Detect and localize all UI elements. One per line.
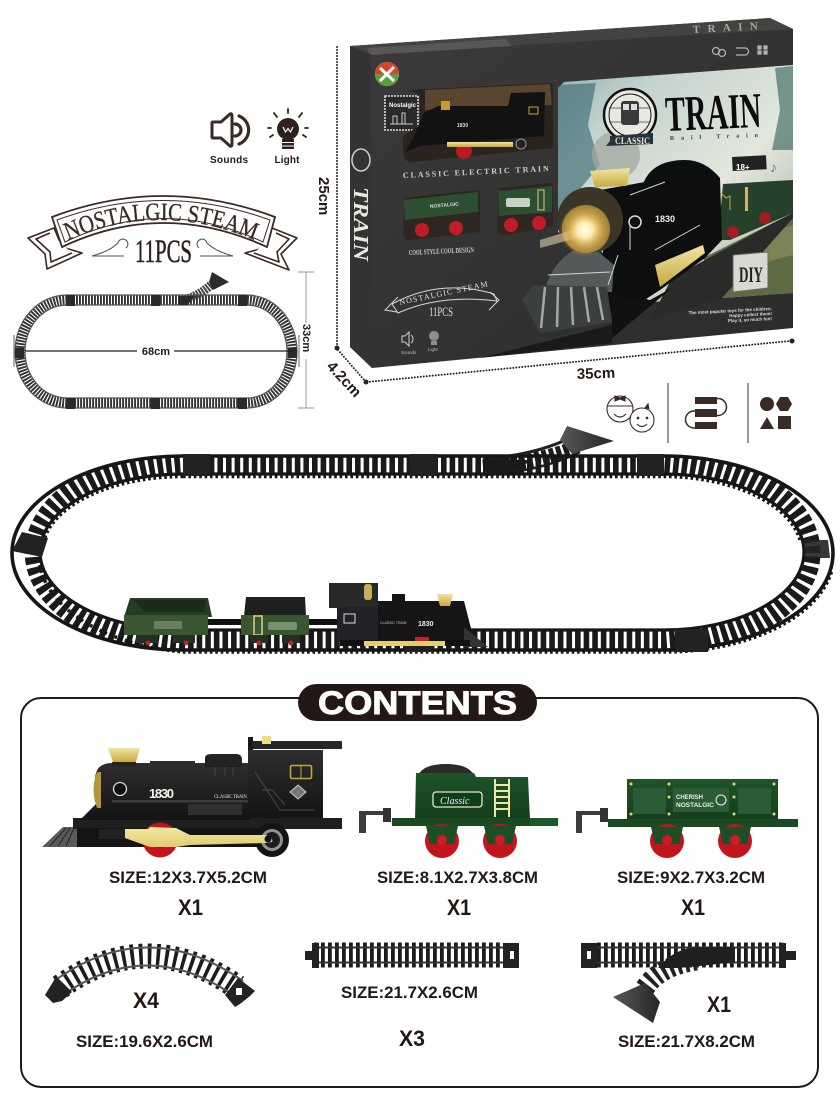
- label: NOSTALGIC: [676, 802, 714, 809]
- smoke: [592, 131, 640, 179]
- gold rod: [125, 827, 272, 847]
- icon: sounds: [210, 114, 249, 166]
- size labels row one: SIZE:12X3.7X5.2CM: [109, 869, 267, 887]
- quantities row two: [133, 988, 731, 1051]
- height measure: [298, 272, 314, 408]
- box stamp: Nostalgic: [389, 103, 417, 109]
- forest: [703, 213, 793, 298]
- rail studs: [40, 476, 832, 652]
- quantities row one: X1: [681, 895, 705, 920]
- name text: CLASSIC TRAIN: [214, 795, 247, 800]
- label: CHERISH: [676, 795, 703, 801]
- box feature icons: [401, 331, 439, 355]
- box art scene: [558, 65, 793, 302]
- small track diagram: [14, 272, 314, 409]
- couplings: [208, 619, 338, 625]
- body: [627, 779, 778, 820]
- size labels row one: [109, 869, 765, 887]
- curved track piece: [45, 948, 255, 1007]
- art title: TRAIN: [664, 82, 762, 142]
- ribbon body: [52, 196, 275, 247]
- chassis: [73, 818, 342, 829]
- box stamp: [385, 96, 418, 130]
- tender: [359, 764, 558, 858]
- red driving wheel: [142, 822, 178, 858]
- box small print: Happy collect them!: [729, 311, 773, 318]
- box spine: TRAIN: [349, 187, 373, 262]
- rod plate: [655, 245, 705, 287]
- art subtitle: Rail Train: [670, 133, 759, 142]
- wheels: [650, 824, 684, 858]
- locomotive on track: CLASSIC TRAIN: [380, 621, 407, 625]
- box body: [350, 18, 793, 368]
- dimension: box depth: 4.2cm: [323, 358, 365, 401]
- cab: [248, 750, 323, 818]
- cowcatcher: [522, 285, 612, 333]
- product box: [349, 18, 800, 368]
- art headlight beam: [540, 226, 585, 248]
- art medallion: CLASSIC: [615, 136, 650, 146]
- box feature icons: Sounds: [401, 350, 417, 355]
- track bed: [650, 213, 793, 320]
- flap title: TRAIN: [693, 21, 758, 36]
- art medallion: [604, 89, 656, 146]
- box window: locomotive: [403, 83, 553, 162]
- chassis: [608, 819, 798, 827]
- icon: sounds: Sounds: [210, 155, 248, 166]
- dimension: box width: [364, 338, 794, 384]
- chimney: [590, 168, 630, 187]
- box spine: [349, 46, 373, 368]
- art headlight glow: [559, 204, 611, 256]
- boiler front gold: [94, 772, 101, 808]
- art big locomotive: [480, 160, 793, 358]
- icon: children: [607, 396, 654, 432]
- box small print: [688, 306, 773, 323]
- flap icons: [712, 46, 767, 56]
- quantities row two: X3: [399, 1026, 425, 1051]
- train on track: [124, 583, 488, 647]
- lower wheels: [612, 288, 672, 338]
- box logo: [375, 62, 399, 86]
- ladder: [495, 779, 509, 817]
- dome: [205, 754, 242, 767]
- icon: track loop: [686, 397, 726, 429]
- locomotive: [42, 736, 342, 858]
- art age tag: 18+: [736, 163, 750, 172]
- box window: locomotive: 1830: [457, 123, 468, 129]
- box window: tender: [497, 183, 553, 235]
- number badge: [114, 782, 126, 796]
- large track layout: [12, 426, 833, 652]
- highlights: [548, 182, 700, 285]
- locomotive on track: 1830: [418, 621, 434, 628]
- size labels row two: SIZE:21.7X2.6CM: [341, 984, 478, 1002]
- smokebox shroud: [547, 245, 614, 292]
- ribbon tails: [28, 228, 297, 270]
- wheels: [425, 824, 459, 858]
- width measure: 68cm: [142, 346, 170, 358]
- cab diamond: [290, 785, 306, 799]
- straight track piece: [305, 943, 519, 968]
- quantities row two: X1: [707, 992, 731, 1017]
- box small print: The most popular toys for the children.: [688, 306, 772, 315]
- banner: nostalgic steam: [27, 195, 298, 271]
- hitch: [359, 811, 383, 833]
- badge: [433, 792, 482, 807]
- ribbon text: NOSTALGIC STEAM: [62, 203, 260, 240]
- switch track piece: [581, 943, 796, 1023]
- left trees: [558, 83, 600, 232]
- switch branch: [180, 272, 229, 301]
- cab window: [290, 766, 312, 778]
- label: [673, 788, 729, 812]
- tender on track: [241, 597, 309, 646]
- number text: 1830: [149, 786, 174, 801]
- right trees: [772, 66, 793, 150]
- cars behind: [718, 180, 793, 240]
- icon: light: Light: [274, 155, 300, 166]
- body: [415, 773, 530, 820]
- dimension: box width: 35cm: [577, 365, 615, 383]
- rear wheel: [255, 823, 289, 857]
- dimension: box height: 25cm: [315, 177, 332, 215]
- size labels row one: SIZE:8.1X2.7X3.8CM: [377, 869, 538, 887]
- box feature icons: Light: [428, 347, 439, 352]
- quantities row two: X4: [133, 988, 160, 1013]
- contents panel: [21, 684, 818, 1087]
- icon: shapes: [760, 397, 792, 429]
- box mini banner: [385, 279, 499, 319]
- box small print: Play it, so much fun!: [728, 316, 773, 323]
- box top flap: [350, 18, 793, 54]
- quantities row one: [178, 895, 705, 920]
- wagon: [576, 779, 798, 858]
- wagon on track: [124, 598, 212, 646]
- hitch: [576, 811, 600, 833]
- rails: [12, 456, 833, 650]
- divider: [668, 383, 748, 443]
- art age tag: ♪: [770, 159, 777, 175]
- boiler: [80, 763, 250, 820]
- art badge: DIY: [739, 262, 763, 287]
- cowcatcher: [42, 827, 78, 847]
- art badge: [733, 252, 768, 292]
- box window: wagon: NOSTALGIC: [430, 201, 460, 210]
- tender: Classic: [440, 796, 470, 807]
- height measure: 33cm: [300, 324, 312, 352]
- track connectors: [15, 295, 297, 409]
- size labels row one: SIZE:9X2.7X3.2CM: [617, 869, 765, 887]
- icon: light: [268, 109, 308, 166]
- width measure: [14, 335, 299, 367]
- box mini banner: 11PCS: [429, 304, 453, 319]
- quantities row one: X1: [178, 895, 203, 920]
- dome and boiler: [600, 160, 722, 320]
- flourishes: [92, 239, 233, 256]
- size labels row two: SIZE:21.7X8.2CM: [618, 1033, 755, 1051]
- panel frame: [21, 698, 818, 1087]
- size labels row two: SIZE:19.6X2.6CM: [76, 1033, 213, 1051]
- size labels row two: [76, 984, 755, 1051]
- chimney: [108, 748, 140, 762]
- switch branch: [483, 426, 614, 475]
- coal: [418, 764, 474, 775]
- contents heading: CONTENTS: [318, 685, 517, 721]
- art big locomotive: 1830: [655, 214, 675, 224]
- sleepers: [43, 465, 803, 640]
- box window: wagon: [403, 190, 480, 240]
- connectors: [12, 454, 830, 652]
- box caption: CLASSIC ELECTRIC TRAIN: [403, 164, 549, 180]
- art age tag: [732, 155, 777, 175]
- piece count: 11PCS: [135, 234, 192, 270]
- front disc: [557, 187, 623, 253]
- quantities row one: X1: [447, 895, 471, 920]
- chassis: [392, 818, 558, 826]
- box caption two: COOL STYLE COOL DESIGN: [409, 245, 474, 257]
- locomotive on track: [329, 583, 488, 647]
- dimension: box height: [315, 47, 340, 350]
- rivets: [630, 782, 776, 816]
- box mini banner: NOSTALGIC STEAM: [399, 279, 488, 307]
